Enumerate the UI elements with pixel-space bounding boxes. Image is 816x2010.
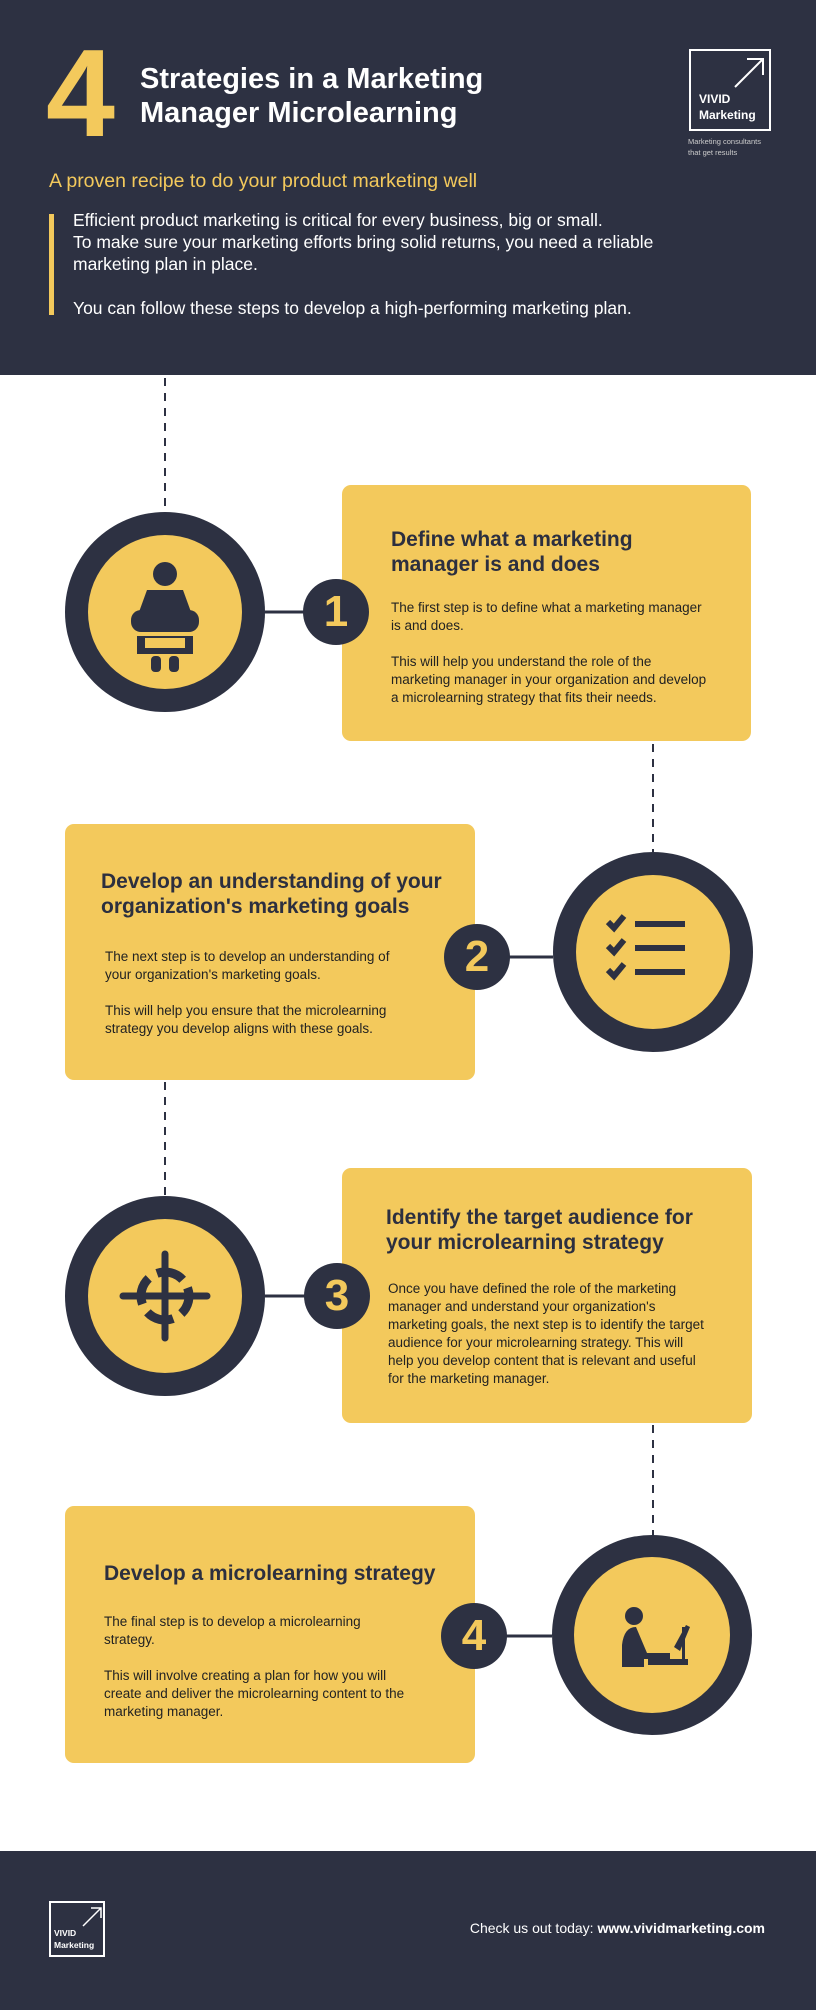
card 3: your microlearning strategy — [386, 1231, 664, 1254]
logo: Marketing — [699, 108, 756, 122]
accent bar — [49, 214, 54, 315]
card 2: This will help you ensure that the microlearning — [105, 1003, 386, 1018]
header panel — [0, 0, 816, 375]
card 3: audience for your microlearning strategy. This will — [388, 1335, 683, 1350]
intro text: To make sure your marketing efforts bring solid returns, you need a reliable — [73, 232, 653, 252]
intro text: You can follow these steps to develop a high-performing marketing plan. — [73, 298, 632, 318]
intro text: marketing plan in place. — [73, 254, 258, 274]
logo tagline: Marketing consultants — [688, 137, 761, 146]
badge 1: 1 — [324, 587, 348, 636]
badge 3: 3 — [325, 1271, 349, 1320]
card 3: Identify the target audience for — [386, 1206, 693, 1229]
subtitle: A proven recipe to do your product marketing well — [49, 170, 477, 192]
card 4: marketing manager. — [104, 1704, 223, 1719]
icon circle 2: checklist — [553, 852, 753, 1052]
badge 2 — [444, 924, 510, 990]
logo — [689, 49, 771, 131]
card 1: The first step is to define what a marketing manager — [391, 600, 702, 615]
card 1: a microlearning strategy that fits their needs. — [391, 690, 657, 705]
card 2: strategy you develop aligns with these goals. — [105, 1021, 373, 1036]
card 4: create and deliver the microlearning content to the — [104, 1686, 404, 1701]
card 4: The final step is to develop a microlearning — [104, 1614, 361, 1629]
logo tagline: that get results — [688, 148, 737, 157]
intro text: Efficient product marketing is critical for every business, big or small. — [73, 210, 603, 230]
card 1: This will help you understand the role of the — [391, 654, 651, 669]
title: Manager Microlearning — [140, 97, 457, 129]
card 2: organization's marketing goals — [101, 895, 409, 918]
card 1: marketing manager in your organization and develop — [391, 672, 706, 687]
badge 1 — [303, 579, 369, 645]
card 4 — [65, 1506, 475, 1763]
card 1: manager is and does — [391, 553, 600, 576]
icon circle 1: presenter — [65, 512, 265, 712]
footer logo: Marketing — [54, 1940, 94, 1950]
card 3: Once you have defined the role of the marketing — [388, 1281, 676, 1296]
badge 2: 2 — [465, 932, 489, 981]
card 2: your organization's marketing goals. — [105, 967, 321, 982]
card 2: Develop an understanding of your — [101, 870, 442, 893]
badge 4 — [441, 1603, 507, 1669]
footer — [0, 1851, 816, 2010]
card 3: for the marketing manager. — [388, 1371, 549, 1386]
card 4: This will involve creating a plan for how you will — [104, 1668, 386, 1683]
icon circle 4: person at computer — [552, 1535, 752, 1735]
big number 4: 4 — [46, 25, 115, 163]
badge 4: 4 — [462, 1611, 486, 1660]
card 3: manager and understand your organization's — [388, 1299, 656, 1314]
card 1 — [342, 485, 751, 741]
title: Strategies in a Marketing — [140, 63, 483, 95]
card 3 — [342, 1168, 752, 1423]
logo: VIVID — [699, 92, 730, 106]
intro text — [73, 210, 653, 318]
card 1: Define what a marketing — [391, 528, 633, 551]
footer link text: Check us out today: www.vividmarketing.com — [470, 1920, 765, 1936]
footer logo — [49, 1901, 105, 1957]
card 2: The next step is to develop an understanding of — [105, 949, 389, 964]
card 4: Develop a microlearning strategy — [104, 1562, 435, 1585]
icon circle 3: target — [65, 1196, 265, 1396]
card 3: marketing goals, the next step is to identify the target — [388, 1317, 704, 1332]
card 1: is and does. — [391, 618, 464, 633]
logo tagline — [688, 137, 761, 157]
footer logo: VIVID — [54, 1928, 76, 1938]
badge 3 — [304, 1263, 370, 1329]
card 2 — [65, 824, 475, 1080]
card 3: help you develop content that is relevant and useful — [388, 1353, 696, 1368]
card 4: strategy. — [104, 1632, 155, 1647]
title — [140, 63, 483, 129]
